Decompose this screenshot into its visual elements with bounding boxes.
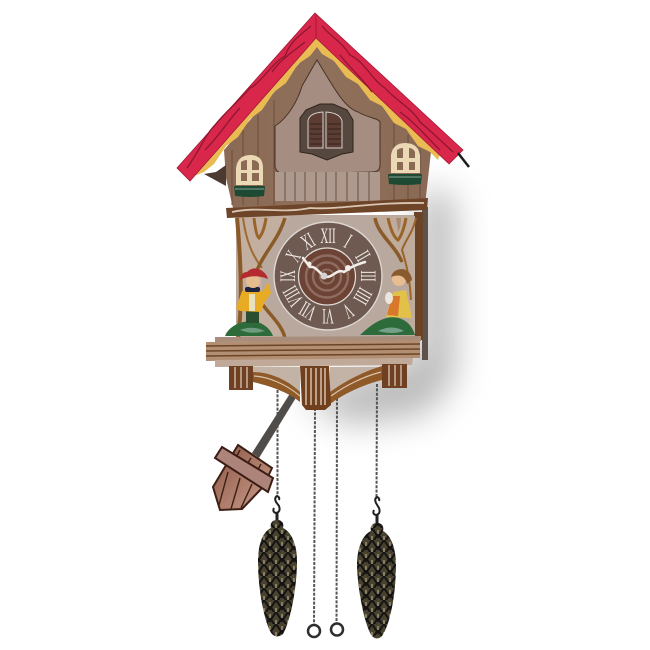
pendulum <box>213 392 297 510</box>
right arm <box>330 366 382 404</box>
right chain <box>376 384 378 497</box>
wood grain <box>232 100 420 205</box>
left pine cone weight <box>258 496 297 636</box>
roman numerals: X <box>281 246 306 265</box>
upper house body <box>204 44 431 208</box>
roman numerals: II <box>350 247 375 265</box>
roman numerals: XII <box>320 224 336 248</box>
roman numerals: VI <box>322 304 334 328</box>
clock dial <box>274 222 382 330</box>
cuckoo door <box>300 104 353 160</box>
chains <box>278 384 377 625</box>
lower valance <box>215 358 413 410</box>
centre panel <box>275 60 380 174</box>
centre post <box>300 366 331 410</box>
clock hands <box>303 258 365 280</box>
centre left chain <box>314 408 315 625</box>
right flower box <box>388 174 422 185</box>
pendulum bob <box>213 445 272 510</box>
red roof boards <box>177 13 463 181</box>
left bracket <box>229 366 253 390</box>
green base <box>360 317 415 335</box>
roman numerals: III <box>356 271 380 282</box>
left chain <box>276 390 278 496</box>
roof <box>177 13 469 181</box>
pendulum crossbar <box>215 447 273 492</box>
right ring <box>331 624 343 636</box>
girl figurine <box>360 269 415 335</box>
roman numerals: IIII <box>348 284 377 308</box>
pull rings <box>308 624 343 637</box>
bird <box>385 292 393 304</box>
right window <box>388 143 422 185</box>
green base <box>225 321 273 336</box>
roman numerals: VIII <box>278 282 309 310</box>
centre right chain <box>336 398 338 623</box>
left arm <box>253 372 300 402</box>
hanger pin <box>458 153 469 167</box>
hair <box>391 269 412 284</box>
roman numerals: V <box>338 298 357 323</box>
roman numerals: I <box>340 230 356 253</box>
roman numerals: VII <box>295 296 321 325</box>
face <box>246 274 260 288</box>
inner rings <box>298 248 356 305</box>
clock body <box>236 207 428 360</box>
roman numerals: XI <box>297 228 319 255</box>
left window <box>234 155 265 197</box>
roof carving <box>187 26 453 168</box>
left ring <box>308 625 320 637</box>
dress <box>386 290 412 318</box>
boy figurine <box>225 268 273 336</box>
carved shelf under the house <box>226 198 428 218</box>
wall shadow <box>300 190 455 425</box>
roman numerals <box>276 224 380 328</box>
light panels <box>253 367 300 392</box>
legs <box>246 308 259 323</box>
left carved column <box>236 216 290 340</box>
face <box>392 272 406 286</box>
pendulum rod <box>252 392 297 458</box>
right pine cone weight <box>357 497 396 638</box>
red hat <box>240 268 268 280</box>
left flower box <box>234 186 265 197</box>
dial face <box>274 222 382 330</box>
scarf <box>245 287 260 292</box>
roman numerals: IX <box>276 270 300 282</box>
base shelf <box>206 336 421 361</box>
right bracket <box>382 364 407 388</box>
right carved column <box>375 216 416 340</box>
yellow coat <box>236 282 271 312</box>
yellow fringe <box>194 36 440 176</box>
plank wall <box>275 172 380 201</box>
